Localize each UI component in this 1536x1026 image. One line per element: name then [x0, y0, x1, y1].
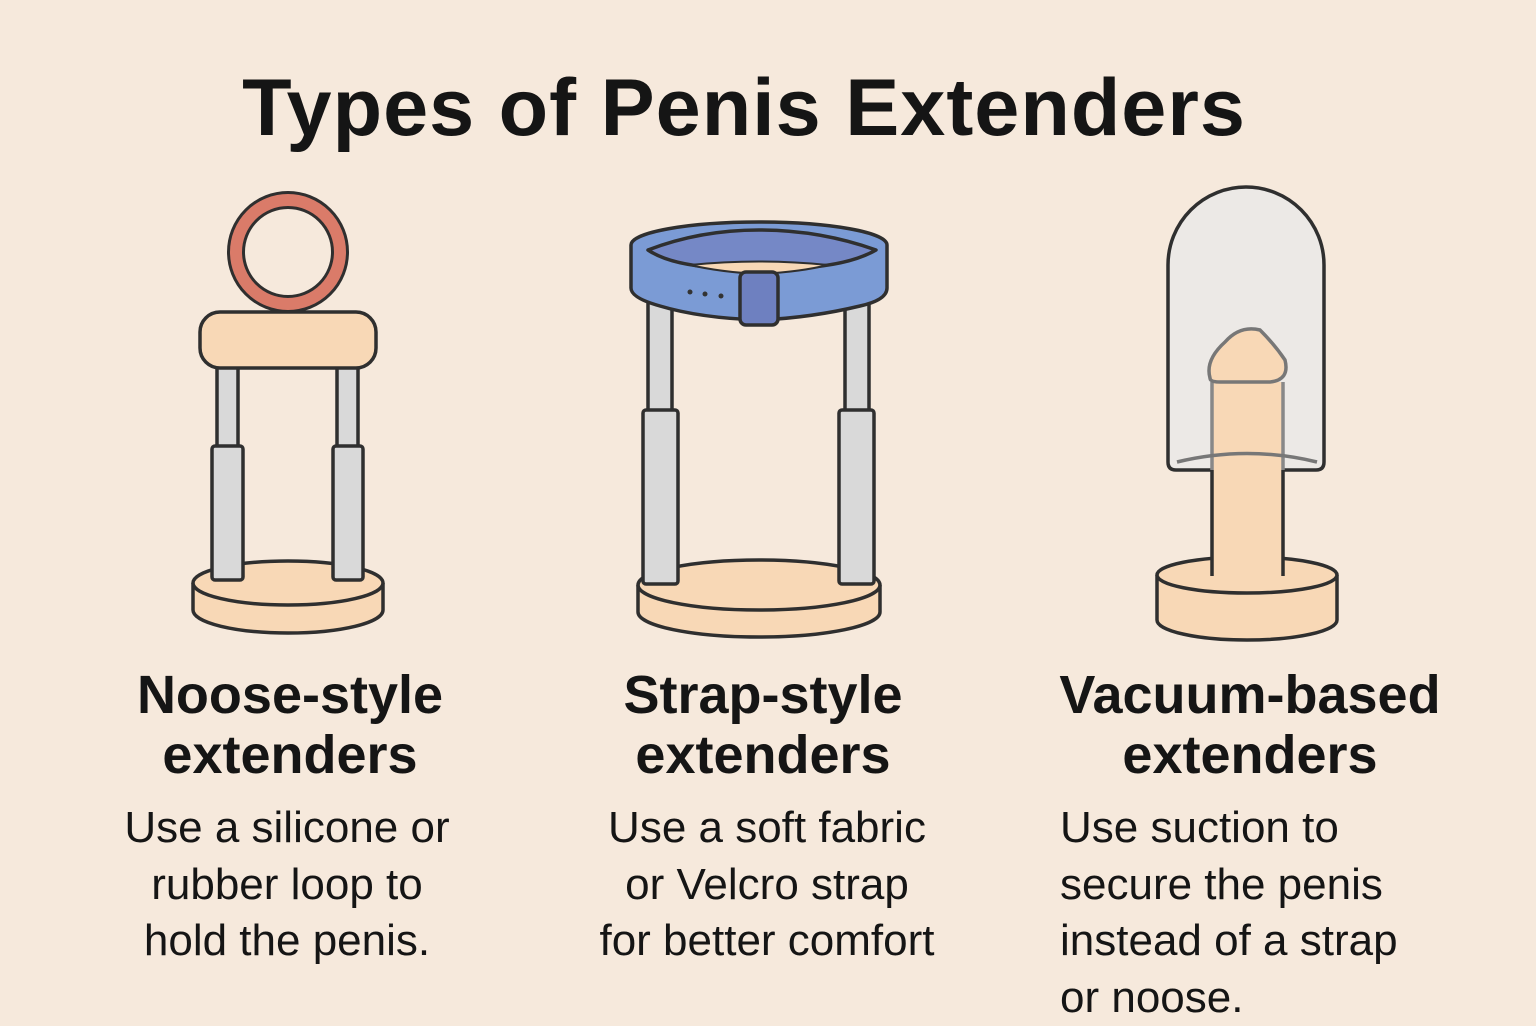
heading: strap: Strap-style	[623, 665, 903, 725]
text: strap: Use a soft fabric	[608, 803, 926, 852]
text: noose: rubber loop to	[151, 860, 423, 908]
text: strap: for better comfort	[599, 916, 934, 965]
text: noose: Use a silicone or	[124, 803, 450, 852]
heading: strap	[623, 665, 903, 785]
text: noose	[124, 803, 450, 965]
heading: noose	[137, 665, 443, 785]
heading: vacuum: extenders	[1122, 725, 1378, 785]
text: strap: or Velcro strap	[625, 860, 909, 908]
icon: vacuum extender	[1157, 187, 1337, 640]
text: strap	[599, 803, 934, 965]
text: vacuum: instead of a strap	[1060, 916, 1398, 965]
heading: noose: extenders	[162, 725, 418, 785]
text: noose: hold the penis.	[144, 916, 430, 965]
text: vacuum: secure the penis	[1060, 860, 1383, 908]
icon: noose extender	[193, 200, 383, 633]
title: Types of Penis Extenders	[242, 63, 1246, 153]
heading: strap: extenders	[635, 725, 891, 785]
text: vacuum: Use suction to	[1060, 803, 1339, 852]
text: vacuum	[1060, 803, 1398, 1022]
heading: vacuum	[1059, 665, 1441, 785]
heading: vacuum: Vacuum-based	[1059, 665, 1441, 725]
heading: noose: Noose-style	[137, 665, 443, 725]
text: vacuum: or noose.	[1060, 972, 1243, 1022]
icon: strap extender	[631, 222, 887, 637]
